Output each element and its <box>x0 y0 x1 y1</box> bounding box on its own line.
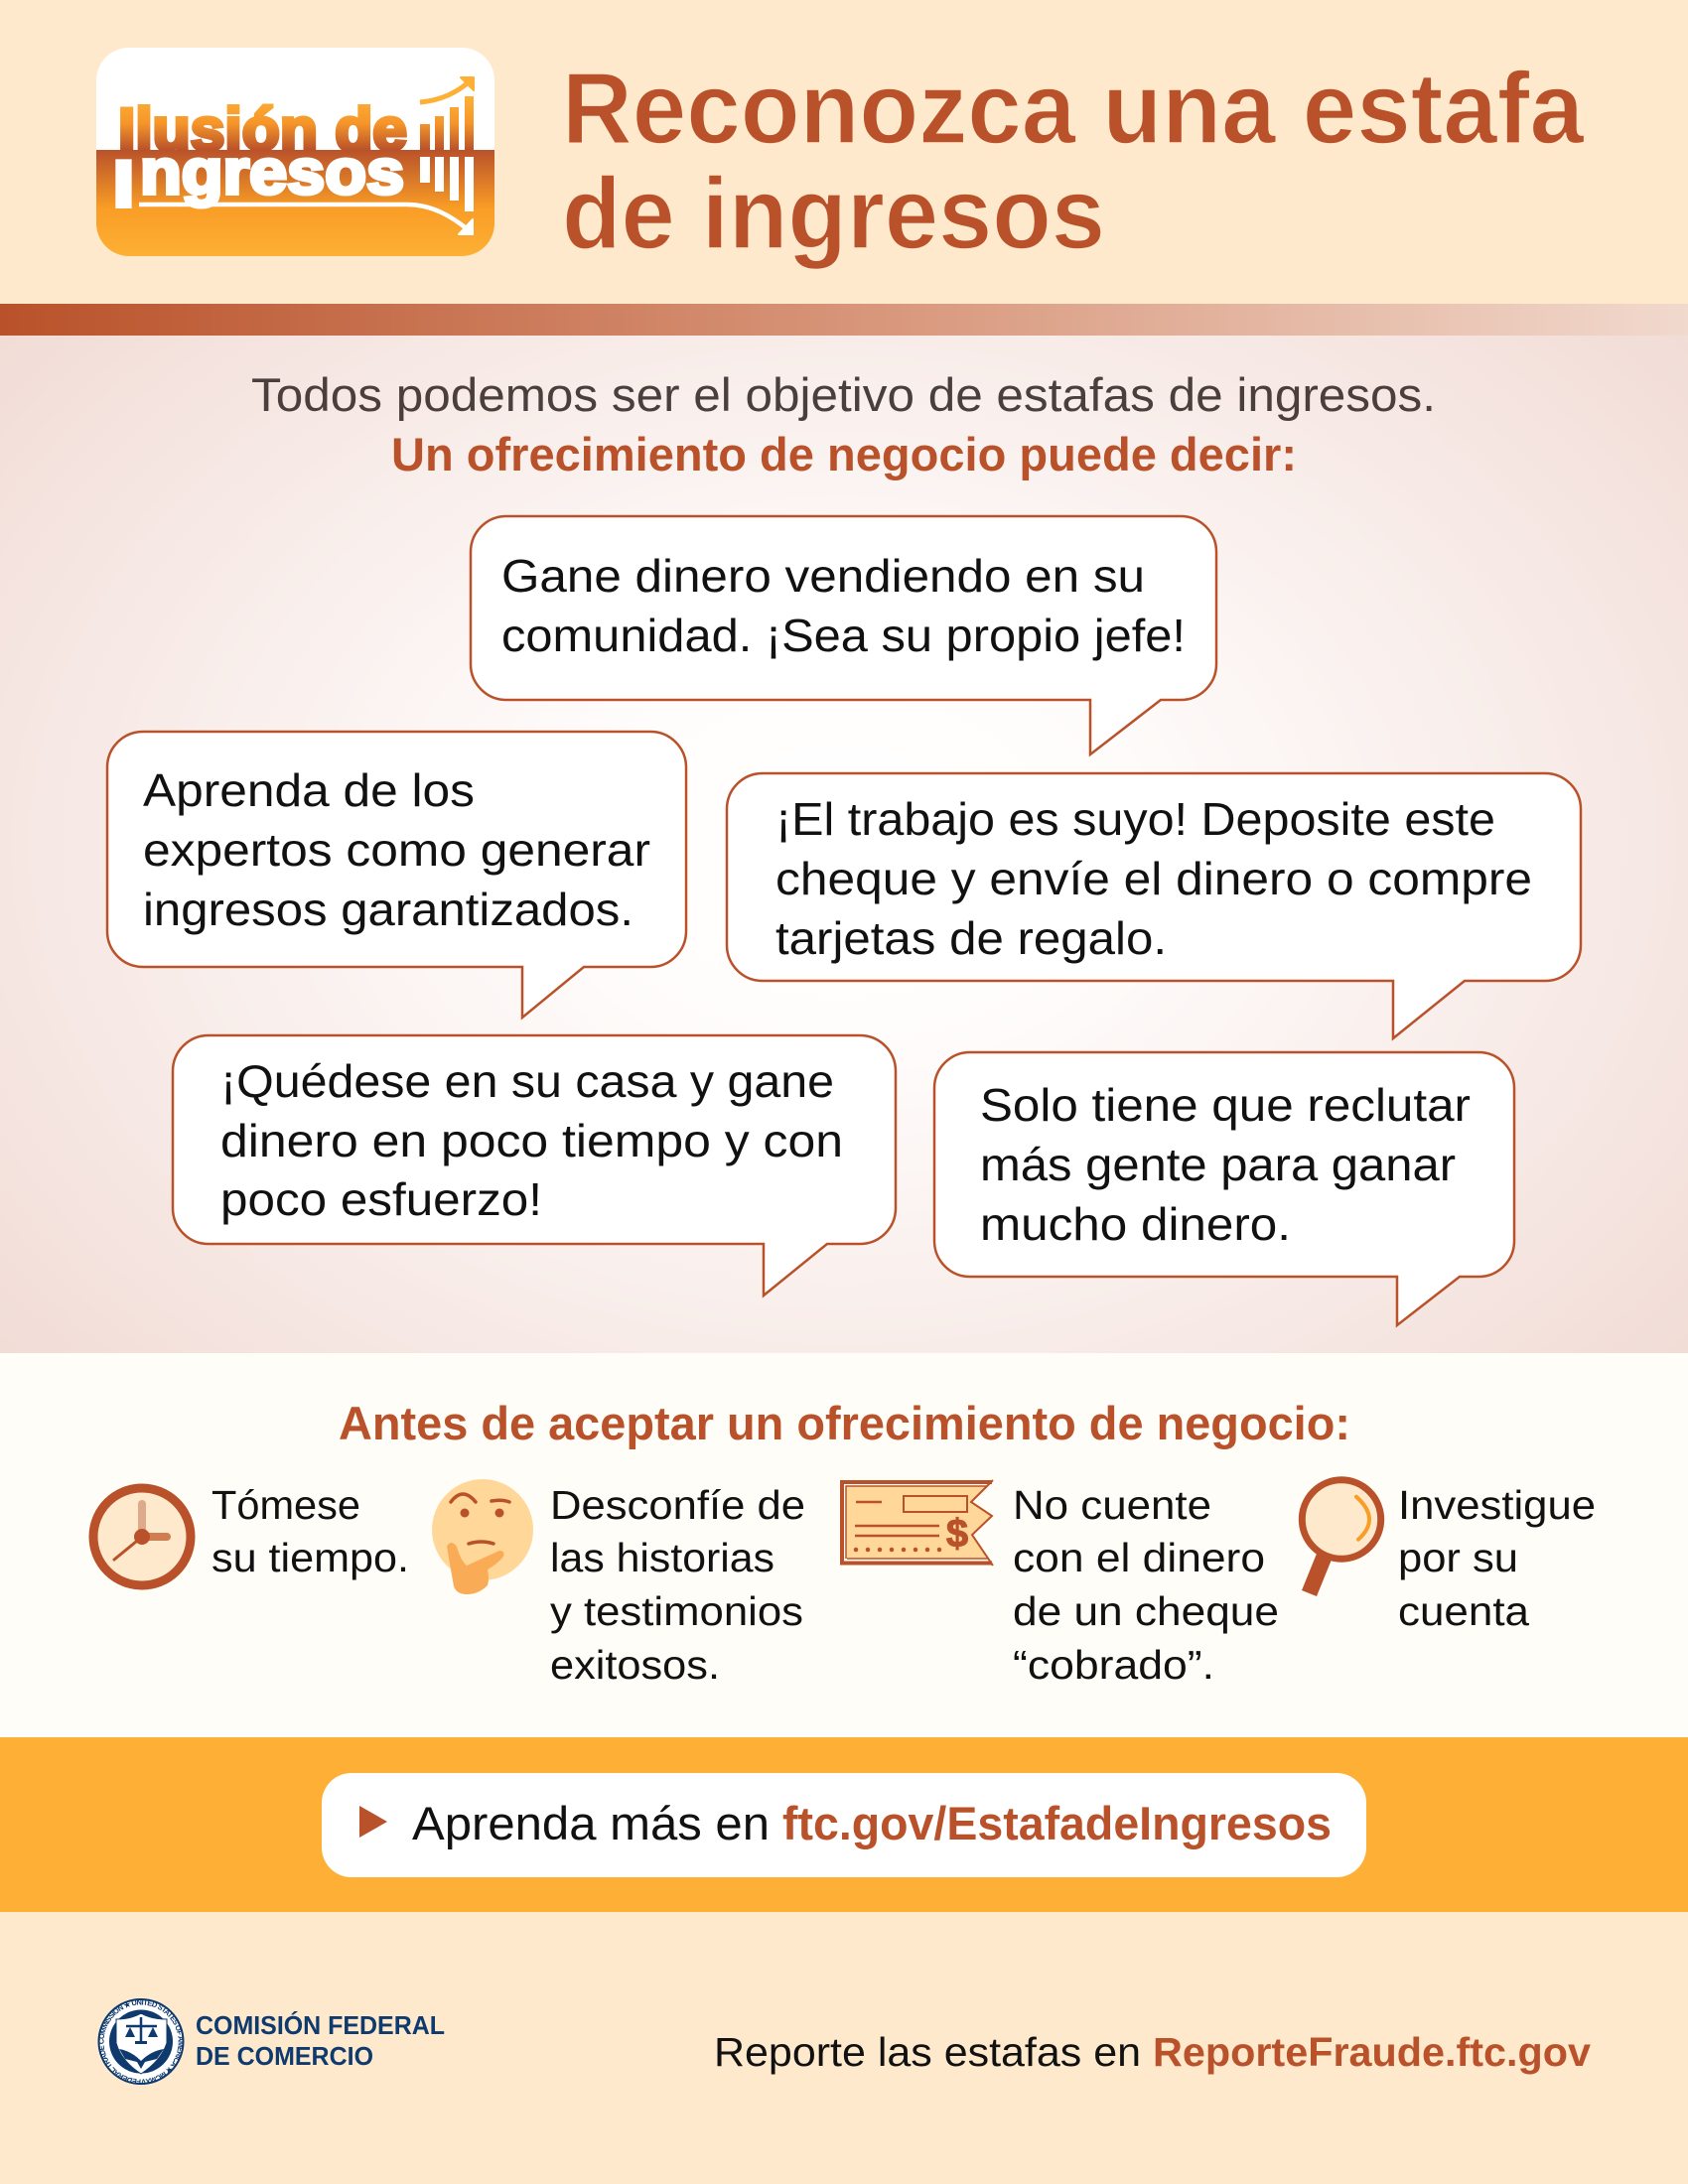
report scams line: ReporteFraude.ftc.gov <box>1153 2029 1591 2075</box>
text: distrust stories <box>550 1482 805 1688</box>
report scams line: Reporte las estafas en <box>714 2029 1141 2075</box>
icon: play arrow <box>359 1806 387 1838</box>
panel: learn more band <box>0 1737 1688 1912</box>
report scams line <box>714 2029 1591 2075</box>
speech bubble: deposit this check <box>727 773 1581 1038</box>
speech bubble: recruit more people: Solo tiene que reclutar <box>980 1079 1471 1131</box>
text: do your own research: por su <box>1398 1535 1518 1580</box>
text: do your own research: Investigue <box>1398 1482 1596 1528</box>
speech bubble: learn from experts <box>107 732 686 1018</box>
speech bubble: learn from experts: expertos como generar <box>143 824 650 876</box>
panel: business offers <box>0 336 1688 1353</box>
text: do not count on check: con el dinero <box>1013 1535 1265 1580</box>
FTC logo <box>97 1998 445 2085</box>
button: learn more <box>322 1773 1366 1877</box>
speech bubble: learn from experts: ingresos garantizados. <box>143 884 633 935</box>
text: distrust stories: exitosos. <box>550 1642 720 1688</box>
speech bubble: learn from experts: Aprenda de los <box>143 764 475 816</box>
speech bubble: stay home: dinero en poco tiempo y con <box>220 1115 843 1166</box>
speech bubble: sell in your community: comunidad. ¡Sea su propio jefe! <box>501 610 1186 661</box>
intro text <box>251 368 1436 480</box>
logo: Ilusión de Ingresos <box>96 48 494 256</box>
icon: thinking face <box>432 1479 533 1594</box>
logo: Ilusión de Ingresos: Ilusión de <box>118 96 407 163</box>
header background <box>0 0 1688 304</box>
title <box>562 52 1585 270</box>
heading: Antes de aceptar un ofrecimiento de negocio: <box>339 1397 1350 1449</box>
text: do your own research <box>1398 1482 1596 1634</box>
icon: magnifying glass <box>1302 1480 1381 1596</box>
speech bubble: deposit this check: ¡El trabajo es suyo! Deposite este <box>775 793 1495 845</box>
speech bubble: deposit this check: tarjetas de regalo. <box>775 912 1167 964</box>
text: do not count on check <box>1013 1482 1279 1688</box>
title: Reconozca una estafa <box>562 52 1585 165</box>
text: do not count on check: No cuente <box>1013 1482 1211 1528</box>
intro text: Un ofrecimiento de negocio puede decir: <box>391 428 1297 480</box>
text: distrust stories: y testimonios <box>550 1588 803 1634</box>
button: learn more: Aprenda más en <box>412 1797 770 1849</box>
button: learn more: ftc.gov/EstafadeIngresos <box>782 1797 1332 1849</box>
icon: check <box>840 1480 993 1566</box>
title: de ingresos <box>562 157 1105 270</box>
footer background <box>0 1912 1688 2184</box>
speech bubble: recruit more people: mucho dinero. <box>980 1198 1291 1250</box>
speech bubble: stay home: poco esfuerzo! <box>220 1173 542 1225</box>
intro text: Todos podemos ser el objetivo de estafas de ingresos. <box>251 368 1436 421</box>
logo: Ilusión de Ingresos: I <box>111 147 135 222</box>
text: distrust stories: las historias <box>550 1535 774 1580</box>
icon: clock <box>93 1488 191 1585</box>
text: take your time: su tiempo. <box>211 1535 409 1580</box>
speech bubble: recruit more people: más gente para ganar <box>980 1139 1456 1190</box>
text: do not count on check: “cobrado”. <box>1013 1642 1214 1688</box>
text: do your own research: cuenta <box>1398 1588 1529 1634</box>
text: take your time <box>211 1482 409 1580</box>
text: do not count on check: de un cheque <box>1013 1588 1279 1634</box>
logo: Ilusión de Ingresos: ngresos <box>140 136 404 207</box>
speech bubble: recruit more people <box>934 1052 1514 1325</box>
text: distrust stories: Desconfíe de <box>550 1482 805 1528</box>
FTC logo: COMISIÓN FEDERAL <box>196 2010 445 2040</box>
speech bubble: sell in your community: Gane dinero vendiendo en su <box>501 550 1145 602</box>
panel: before accepting <box>0 1353 1688 1737</box>
speech bubble: deposit this check: cheque y envíe el dinero o compre <box>775 853 1532 904</box>
icon: FTC seal: FEDERAL TRADE COMMISSION ★ UNITED STATES OF AMERICA ★ MCMXV <box>99 2000 183 2085</box>
text: take your time: Tómese <box>211 1482 360 1528</box>
gradient divider bar <box>0 304 1688 336</box>
speech bubble: sell in your community <box>471 516 1216 754</box>
FTC logo: DE COMERCIO <box>196 2041 373 2071</box>
icon: check: $ <box>946 1512 968 1556</box>
speech bubble: stay home: ¡Quédese en su casa y gane <box>220 1055 834 1107</box>
speech bubble: stay home <box>173 1035 896 1296</box>
